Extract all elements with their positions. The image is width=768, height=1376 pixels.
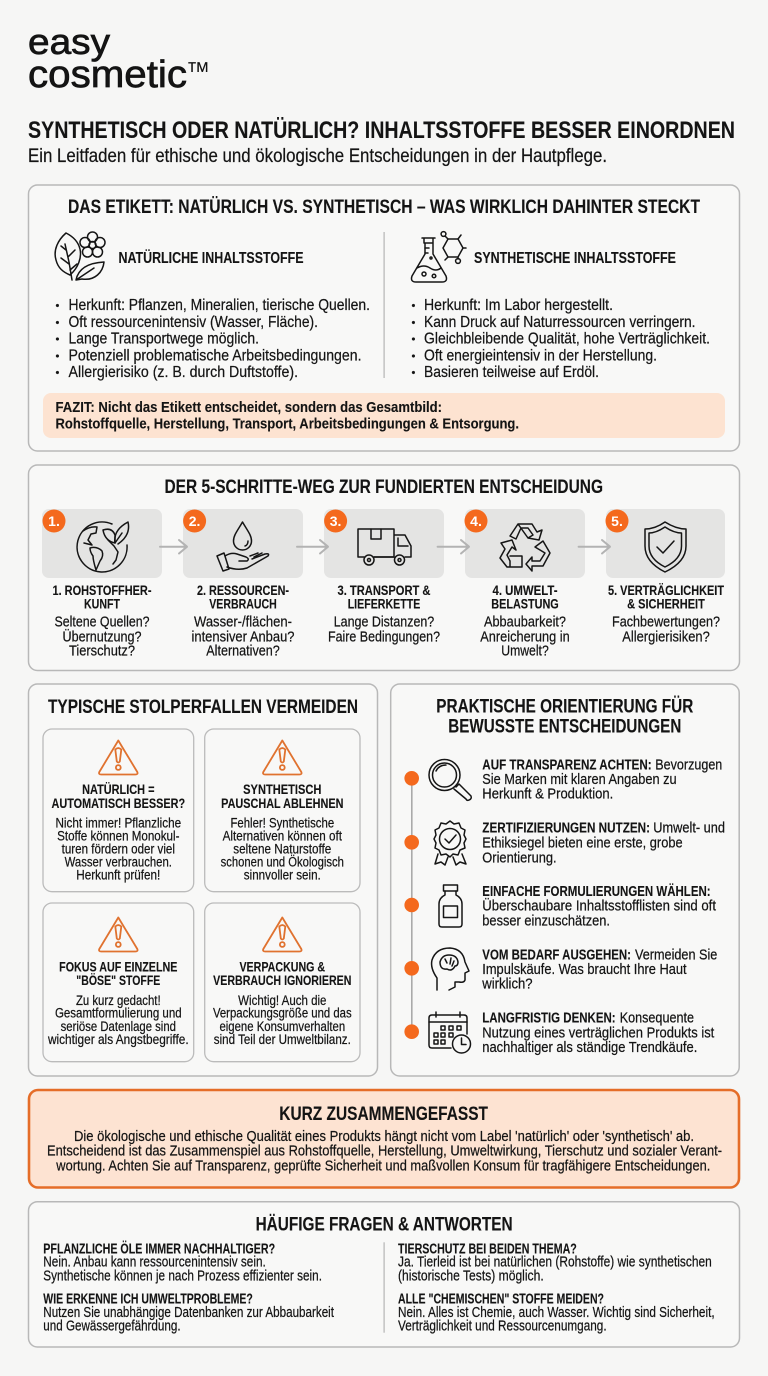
card: natürlich = besser: turen fördern oder viel	[62, 842, 175, 857]
faq: tierschutz	[398, 1241, 712, 1284]
list: synthetische: Herkunft: Im Labor hergestellt.	[424, 297, 613, 314]
item: bedarf	[432, 947, 717, 993]
label: step 1	[52, 583, 152, 660]
list: synthetische: Kann Druck auf Naturressourcen verringern.	[424, 314, 696, 331]
faq: tierschutz: (historische Tests) möglich.	[398, 1268, 544, 1284]
list: natürliche: •	[56, 350, 60, 362]
item: bedarf: Impulskäufe. Was braucht Ihre Haut	[482, 962, 687, 978]
item: transparenz: Herkunft & Produktion.	[482, 787, 613, 803]
logo	[28, 21, 210, 96]
step 5: 5.	[611, 513, 623, 529]
arrow 3	[438, 540, 469, 554]
faq: chemische stoffe: ALLE "CHEMISCHEN" STOFFE MEIDEN?	[398, 1291, 604, 1307]
item: bedarf: Vermeiden Sie	[635, 947, 717, 963]
list: synthetische: •	[412, 367, 416, 379]
card: fokus auf einzelne stoffe: Gesamtformulierung und	[55, 1006, 182, 1021]
icon: magnifier	[429, 760, 471, 800]
item: langfristig	[429, 1011, 714, 1056]
icon: flask and molecule	[412, 232, 466, 282]
card: fokus auf einzelne stoffe: FOKUS AUF EINZELNE	[59, 960, 177, 975]
item: langfristig: nachhaltiger als ständige Trendkäufe.	[482, 1040, 697, 1056]
icon: truck	[358, 529, 411, 565]
label: step 1: Tierschutz?	[69, 644, 135, 660]
item: langfristig: Konsequente	[620, 1011, 694, 1027]
panel: stolperfallen	[28, 684, 378, 1076]
item: formulierungen: besser einzuschätzen.	[482, 913, 610, 929]
item: langfristig: Nutzung eines verträglichen Produkts ist	[482, 1025, 714, 1041]
label: step 1: 1. ROHSTOFFHER-	[52, 583, 152, 598]
icon: globe with leaves	[77, 522, 129, 572]
icon: shield with check	[645, 522, 686, 572]
card: synthetisch ablehnen: Fehler! Synthetische	[230, 816, 334, 831]
label: step 3	[328, 583, 440, 646]
panel: das etikett	[28, 185, 740, 451]
item: zertifizierungen: ZERTIFIZIERUNGEN NUTZEN:	[482, 821, 650, 837]
card: fokus auf einzelne stoffe: wichtiger als Angstbegriffe.	[47, 1032, 189, 1047]
label: step 5: Fachbewertungen?	[612, 615, 720, 631]
heading: praktische orientierung: PRAKTISCHE ORIENTIERUNG FÜR	[436, 695, 693, 718]
list: natürliche: •	[56, 367, 60, 379]
faq: chemische stoffe	[398, 1291, 715, 1335]
label: step 4: BELASTUNG	[491, 597, 559, 612]
label: step 3: Faire Bedingungen?	[328, 630, 440, 646]
card: synthetisch ablehnen: seltene Naturstoffe	[233, 842, 331, 857]
card: natürlich = besser: AUTOMATISCH BESSER?	[52, 796, 185, 811]
step 4: 4.	[470, 513, 482, 529]
faq: umweltprobleme: WIE ERKENNE ICH UMWELTPROBLEME?	[43, 1291, 253, 1307]
card: verpackung ignorieren: VERBRAUCH IGNORIEREN	[213, 973, 351, 988]
icon: bottle	[439, 885, 462, 927]
faq: umweltprobleme	[43, 1291, 334, 1335]
panel: praktische orientierung	[391, 684, 739, 1076]
heading: praktische orientierung	[436, 695, 693, 738]
label: step 2: 2. RESSOURCEN-	[197, 583, 289, 598]
icon: warning	[99, 740, 138, 774]
card: synthetisch ablehnen: PAUSCHAL ABLEHNEN	[221, 796, 343, 811]
list: synthetische: Basieren teilweise auf Erdöl.	[424, 364, 599, 381]
logo: cosmetic	[28, 54, 187, 96]
faq: umweltprobleme: und Gewässergefährdung.	[43, 1319, 181, 1335]
item: formulierungen: EINFACHE FORMULIERUNGEN WÄHLEN:	[482, 883, 711, 900]
card: fokus auf einzelne stoffe	[43, 903, 194, 1062]
heading: 5 schritte: DER 5-SCHRITTE-WEG ZUR FUNDIERTEN ENTSCHEIDUNG	[164, 476, 603, 498]
card: fokus auf einzelne stoffe: Zu kurz gedacht!	[76, 993, 161, 1008]
heading: synthetische inhaltsstoffe: SYNTHETISCHE INHALTSSTOFFE	[474, 250, 676, 267]
logo: ™	[186, 56, 210, 86]
icon: warning	[263, 918, 302, 952]
card: synthetisch ablehnen: schonen und Ökologisch	[221, 855, 344, 870]
item: zertifizierungen: Orientierung.	[482, 850, 557, 866]
card: verpackung ignorieren	[205, 903, 360, 1062]
heading: faq: HÄUFIGE FRAGEN & ANTWORTEN	[256, 1213, 513, 1236]
list: synthetische: Oft energieintensiv in der Herstellung.	[424, 348, 657, 364]
callout: fazit	[43, 393, 725, 438]
faq: pflanzliche öle	[43, 1240, 322, 1284]
card: natürlich = besser	[43, 729, 194, 892]
panel: faq	[28, 1202, 740, 1347]
list: natürliche: •	[56, 334, 60, 346]
label: step 1: Seltene Quellen?	[54, 615, 150, 631]
icon: warning	[263, 740, 302, 774]
icon: head with brain	[432, 948, 469, 990]
step 3	[324, 509, 444, 646]
icon: seal	[434, 821, 466, 865]
list: natürliche: Allergierisiko (z. B. durch Duftstoffe).	[68, 364, 298, 381]
faq: tierschutz: Ja. Tierleid ist bei natürlichen (Rohstoffe) wie synthetischen	[398, 1255, 712, 1271]
label: step 1: Übernutzung?	[62, 628, 142, 646]
label: step 3: LIEFERKETTE	[348, 597, 420, 612]
card: verpackung ignorieren: eigene Konsumverhalten	[219, 1019, 345, 1034]
item: transparenz: Sie Marken mit klaren Angaben zu	[482, 772, 677, 788]
item: formulierungen: Überschaubare Inhaltsstofflisten sind oft	[482, 897, 716, 915]
card: verpackung ignorieren: VERPACKUNG &	[239, 960, 325, 975]
step 4	[464, 509, 585, 660]
list: synthetische: •	[412, 334, 416, 346]
card: natürlich = besser: Stoffe können Monokul-	[57, 829, 179, 844]
icon: warning	[99, 918, 138, 952]
list: synthetische: •	[412, 350, 416, 362]
label: step 2: Wasser-/flächen-	[194, 615, 292, 631]
arrow 2	[297, 540, 328, 554]
item: formulierungen	[439, 883, 716, 929]
callout: fazit: FAZIT: Nicht das Etikett entscheidet, sondern das Gesamtbild:	[56, 399, 442, 416]
item: transparenz	[429, 757, 722, 803]
heading: natürliche inhaltsstoffe: NATÜRLICHE INHALTSSTOFFE	[118, 248, 304, 267]
list: natürliche: Oft ressourcenintensiv (Wasser, Fläche).	[68, 314, 318, 331]
card: fokus auf einzelne stoffe: "BÖSE" STOFFE	[76, 973, 160, 988]
label: step 2	[192, 583, 294, 660]
label: step 2: intensiver Anbau?	[192, 630, 294, 646]
card: synthetisch ablehnen: Alternativen können oft	[223, 829, 342, 844]
list: synthetische: Gleichbleibende Qualität, hohe Verträglichkeit.	[424, 330, 710, 348]
list: natürliche: Herkunft: Pflanzen, Mineralien, tierische Quellen.	[68, 297, 370, 314]
item: zertifizierungen: Umwelt- und	[653, 821, 725, 837]
card: verpackung ignorieren: Wichtig! Auch die	[238, 993, 326, 1008]
label: step 4	[480, 583, 570, 660]
card: synthetisch ablehnen: SYNTHETISCH	[243, 782, 321, 797]
arrow 4	[579, 540, 610, 554]
panel: 5 schritte	[28, 465, 740, 670]
faq: pflanzliche öle: PFLANZLICHE ÖLE IMMER NACHHALTIGER?	[43, 1240, 275, 1257]
list: synthetische: •	[412, 300, 416, 312]
item: langfristig: LANGFRISTIG DENKEN:	[482, 1011, 616, 1027]
subtitle: Ein Leitfaden für ethische und ökologische Entscheidungen in der Hautpflege.	[28, 146, 607, 167]
faq: tierschutz: TIERSCHUTZ BEI BEIDEN THEMA?	[398, 1241, 577, 1257]
faq: umweltprobleme: Nutzen Sie unabhängige Datenbanken zur Abbaubarkeit	[43, 1305, 334, 1321]
panel: kurz zusammengefasst	[29, 1090, 739, 1188]
label: step 4: Anreicherung in	[480, 630, 570, 646]
card: natürlich = besser: Nicht immer! Pflanzliche	[55, 816, 181, 831]
heading: praktische orientierung: BEWUSSTE ENTSCHEIDUNGEN	[448, 716, 681, 738]
label: step 5: & SICHERHEIT	[627, 597, 705, 612]
label: step 5	[608, 583, 725, 646]
label: step 2: VERBRAUCH	[209, 597, 277, 612]
label: step 5: 5. VERTRÄGLICHKEIT	[608, 583, 725, 598]
step 1: 1.	[48, 513, 60, 529]
list: natürliche: •	[56, 300, 60, 312]
icon: leaves and flower	[55, 232, 105, 280]
icon: hand with water drop	[217, 522, 269, 571]
list: natürliche: •	[56, 317, 60, 329]
logo: easy	[28, 21, 110, 62]
card: verpackung ignorieren: sind Teil der Umweltbilanz.	[214, 1032, 351, 1047]
summary text	[47, 1128, 722, 1174]
label: step 1: KUNFT	[84, 597, 121, 612]
item: zertifizierungen: Ethiksiegel bieten eine erste, grobe	[482, 835, 683, 851]
item: bedarf: wirklich?	[481, 977, 533, 993]
step 2: 2.	[189, 513, 200, 529]
step 2	[183, 509, 303, 660]
list: natürliche	[56, 297, 370, 381]
list: natürliche: Lange Transportwege möglich.	[68, 330, 259, 348]
card: synthetisch ablehnen	[205, 729, 360, 892]
item: transparenz: Bevorzugen	[655, 757, 722, 773]
list: synthetische: •	[412, 317, 416, 329]
label: step 5: Allergierisiken?	[622, 630, 710, 646]
step 3: 3.	[330, 513, 341, 529]
faq: chemische stoffe: Verträglichkeit und Ressourcenumgang.	[398, 1319, 607, 1335]
faq: pflanzliche öle: Nein. Anbau kann ressourcenintensiv sein.	[43, 1255, 266, 1271]
step 5	[606, 509, 725, 646]
item: transparenz: AUF TRANSPARENZ ACHTEN:	[482, 757, 652, 773]
card: natürlich = besser: NATÜRLICH =	[82, 782, 155, 797]
faq: pflanzliche öle: Synthetische können je nach Prozess effizienter sein.	[43, 1268, 322, 1284]
icon: calendar and clock	[429, 1012, 470, 1053]
card: fokus auf einzelne stoffe: seriöse Datenlage sind	[61, 1019, 176, 1034]
list: synthetische	[412, 297, 710, 381]
label: step 3: Lange Distanzen?	[334, 615, 434, 631]
label: step 3: 3. TRANSPORT &	[338, 583, 431, 598]
list: natürliche: Potenziell problematische Arbeitsbedingungen.	[68, 348, 362, 364]
item: zertifizierungen	[434, 821, 725, 866]
timeline	[404, 771, 419, 1039]
card: verpackung ignorieren: Verpackungsgröße und das	[213, 1006, 352, 1021]
label: step 4: 4. UMWELT-	[492, 583, 558, 598]
icon: recycling arrows	[500, 524, 550, 571]
label: step 4: Umwelt?	[501, 644, 549, 660]
card: natürlich = besser: Wasser verbrauchen.	[65, 855, 172, 870]
label: step 2: Alternativen?	[206, 644, 280, 660]
callout: fazit: Rohstoffquelle, Herstellung, Transport, Arbeitsbedingungen & Entsorgung.	[56, 416, 519, 432]
item: bedarf: VOM BEDARF AUSGEHEN:	[482, 947, 631, 963]
label: step 4: Abbaubarkeit?	[484, 615, 566, 631]
heading: kurz zusammengefasst: KURZ ZUSAMMENGEFASST	[279, 1103, 488, 1125]
arrow 1	[160, 540, 187, 554]
heading: stolperfallen: TYPISCHE STOLPERFALLEN VERMEIDEN	[48, 696, 358, 718]
card: natürlich = besser: Herkunft prüfen!	[76, 867, 160, 882]
step 1	[42, 509, 162, 660]
card: synthetisch ablehnen: sinnvoller sein.	[244, 867, 321, 882]
